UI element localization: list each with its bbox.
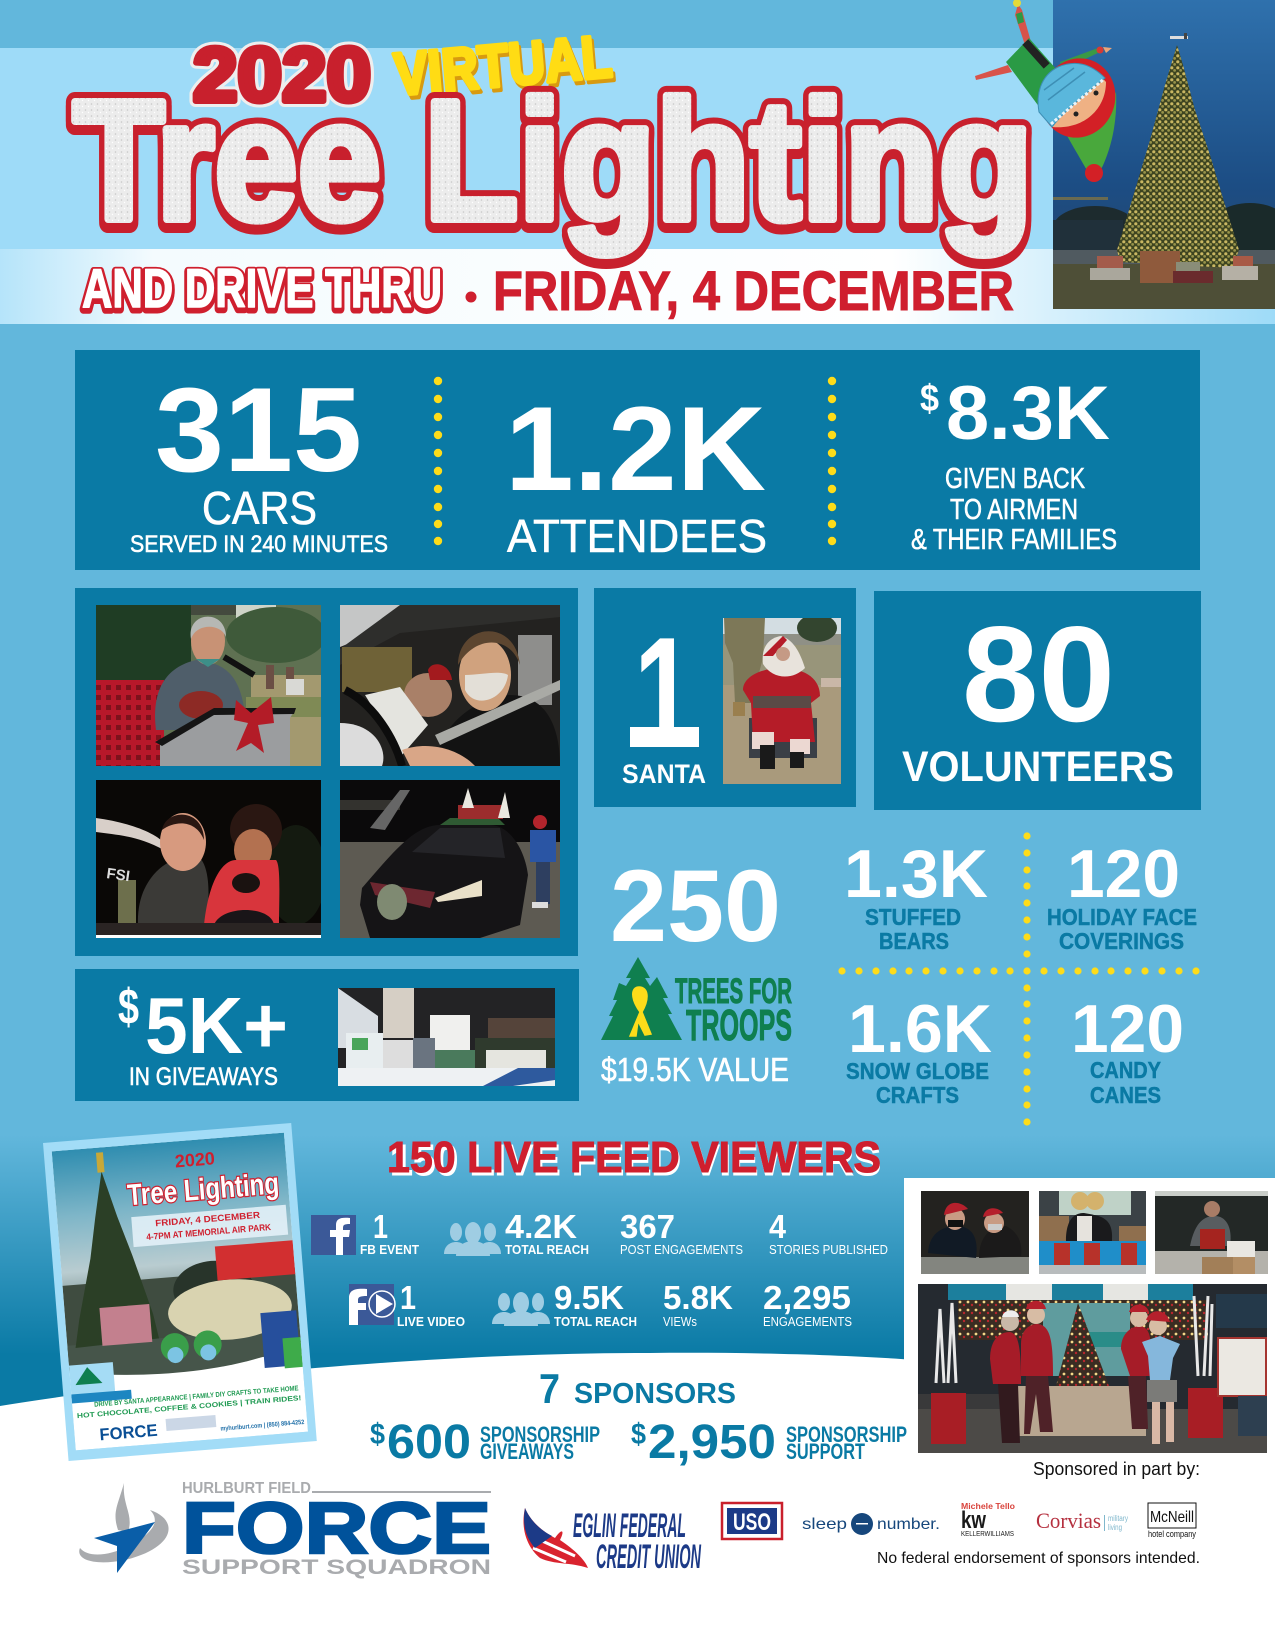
- subtitle: AND DRIVE THRU: AND DRIVE THRU: [82, 259, 442, 321]
- stat: 250 trees for troops: [601, 849, 792, 1088]
- yellow dotted dividers: [434, 377, 836, 545]
- flyer title: [124, 1143, 283, 1243]
- subtitle: date: FRIDAY, 4 DECEMBER: [493, 259, 1014, 322]
- row: Facebook live stats: TOTAL REACH: [554, 1314, 637, 1329]
- photo: Santa in chair: [723, 618, 841, 784]
- panel: 1 Santa: [594, 588, 856, 807]
- stat: holiday face coverings: HOLIDAY FACE: [1047, 904, 1197, 930]
- stat: 8.3K given back: [911, 371, 1117, 556]
- logo: Force Support Squadron: FORCE: [182, 1489, 491, 1569]
- stat: sponsorship support: 2,950: [648, 1416, 776, 1469]
- flyer title: FRIDAY, 4 DECEMBER: [155, 1210, 261, 1228]
- stat: stuffed bears: BEARS: [879, 928, 949, 954]
- row: Facebook live stats: ENGAGEMENTS: [763, 1314, 852, 1329]
- title: VIRTUAL: VIRTUAL: [394, 26, 617, 112]
- title: Tree Lighting: Lighting: [424, 70, 1033, 260]
- flyer title: 4-7PM AT MEMORIAL AIR PARK: [146, 1222, 272, 1242]
- photo: decorated car at night: [340, 780, 560, 938]
- stat: sponsorship support: $: [631, 1418, 646, 1451]
- stat: sponsorship giveaways: [370, 1416, 600, 1469]
- logo: USO: [722, 1503, 782, 1539]
- photo: giveaway prizes: [338, 988, 555, 1086]
- stat: 315 cars: SERVED IN 240 MINUTES: [130, 531, 388, 558]
- logo: Keller Williams: kw: [961, 1507, 986, 1534]
- logo: Eglin Federal Credit Union: [523, 1507, 702, 1576]
- flyer: tree lighting poster: [43, 1123, 317, 1461]
- title: Tree Lighting: Tree: [73, 66, 381, 256]
- row: Facebook live stats: 2,295: [763, 1279, 851, 1316]
- stat: 8.3K given back: 8.3K: [946, 371, 1110, 456]
- photo: woman in car with gift: [340, 605, 560, 766]
- stat: sponsorship giveaways: $: [370, 1418, 385, 1451]
- stat: 1.2K attendees: ATTENDEES: [507, 510, 767, 562]
- photo: volunteers with bags: [1039, 1191, 1146, 1274]
- row: Facebook event stats: 4: [769, 1208, 787, 1245]
- row: Facebook live stats: [349, 1279, 852, 1329]
- stat: sponsorship support: SUPPORT: [786, 1439, 865, 1464]
- flyer title: 2020: [174, 1148, 216, 1171]
- logo: Force Support Squadron: [79, 1480, 491, 1579]
- heading: live feed viewers: 150 LIVE FEED VIEWERS: [390, 1136, 881, 1185]
- title: Tree Lighting: [73, 66, 1033, 260]
- grid dots: [838, 832, 1200, 1126]
- stat: holiday face coverings: 120: [1067, 836, 1180, 912]
- panel: 80 volunteers: [874, 591, 1201, 810]
- disclaimer: No federal endorsement of sponsors intended.: [877, 1550, 1200, 1567]
- stat: stuffed bears: [844, 836, 988, 954]
- panel: 80 volunteers: VOLUNTEERS: [902, 743, 1174, 791]
- logo: Corvias: Corvias: [1036, 1508, 1101, 1533]
- logo: McNeill: hotel company: [1148, 1529, 1196, 1539]
- stat: candy canes: 120: [1071, 991, 1184, 1067]
- stat: 8.3K given back: $: [920, 378, 939, 420]
- panel: giveaways: IN GIVEAWAYS: [129, 1063, 278, 1091]
- stat: sponsorship giveaways: 600: [387, 1416, 471, 1469]
- title: 2020: 2020: [193, 33, 371, 118]
- stat: 8.3K given back: TO AIRMEN: [950, 494, 1078, 526]
- white wave section: [0, 1178, 1275, 1650]
- panel: giveaways: [75, 969, 579, 1101]
- row: Facebook event stats: TOTAL REACH: [505, 1242, 589, 1257]
- stat: sponsorship giveaways: SPONSORSHIP: [480, 1422, 600, 1447]
- panel: giveaways: $: [118, 979, 139, 1035]
- photo: woman and girl at night: FSI: [105, 865, 131, 885]
- icon: Facebook live: [349, 1284, 395, 1325]
- stat: 8.3K given back: & THEIR FAMILIES: [911, 524, 1117, 556]
- stat: holiday face coverings: [1047, 836, 1197, 954]
- logo: Keller Williams: [961, 1502, 1015, 1538]
- row: Facebook event stats: [311, 1208, 888, 1257]
- stat: sponsorship support: [631, 1416, 907, 1469]
- stat: snow globe crafts: [846, 991, 992, 1108]
- stat: snow globe crafts: CRAFTS: [876, 1082, 959, 1108]
- icon: Facebook: [311, 1215, 356, 1255]
- row: Facebook live stats: 9.5K: [554, 1279, 624, 1316]
- logo: Keller Williams: Michele Tello: [961, 1502, 1015, 1511]
- title: Tree Lighting: Tree: [73, 66, 381, 256]
- logo: USO: USO: [733, 1509, 771, 1536]
- stat: 315 cars: CARS: [202, 482, 317, 534]
- sponsors heading: 7: [539, 1365, 560, 1412]
- sponsors heading: [539, 1365, 736, 1412]
- logo: McNeill: [1148, 1503, 1196, 1539]
- icon: upside-down elf: [975, 0, 1126, 182]
- logo: Keller Williams: KELLERWILLIAMS: [961, 1531, 1014, 1538]
- logo: Force Support Squadron: HURLBURT FIELD: [182, 1480, 311, 1497]
- icon: audience: [444, 1222, 501, 1256]
- stat: holiday face coverings: COVERINGS: [1059, 928, 1184, 954]
- stat: stuffed bears: STUFFED: [865, 904, 961, 930]
- logo: Corvias: living: [1108, 1523, 1122, 1532]
- row: Facebook live stats: LIVE VIDEO: [397, 1314, 465, 1329]
- logo: Sleep Number: number.: [877, 1516, 940, 1533]
- icon: Trees for Troops logo: TROOPS: [686, 1001, 792, 1050]
- row: Facebook event stats: POST ENGAGEMENTS: [620, 1242, 743, 1257]
- logo: Force Support Squadron: SUPPORT SQUADRON: [182, 1556, 491, 1579]
- title: Tree Lighting: Lighting: [424, 66, 1033, 256]
- sponsors heading: SPONSORS: [574, 1378, 736, 1410]
- row: Facebook live stats: 1: [400, 1279, 416, 1316]
- infographic canvas: EGLIN FEDERAL: [573, 1507, 686, 1545]
- row: Facebook event stats: STORIES PUBLISHED: [769, 1242, 888, 1257]
- flyer details: [76, 1385, 305, 1446]
- row: Facebook event stats: 4.2K: [505, 1208, 577, 1245]
- row: Facebook event stats: 1: [373, 1208, 388, 1245]
- photo: speaker at podium: [96, 605, 321, 766]
- title: Tree Lighting: Lighting: [424, 66, 1033, 256]
- icon: audience: [492, 1292, 550, 1326]
- panel: 80 volunteers: 80: [962, 598, 1115, 750]
- stat: sponsorship support: SPONSORSHIP: [786, 1422, 907, 1447]
- title: VIRTUAL: VIRTUAL: [392, 22, 615, 108]
- icon: flame and swoosh: [79, 1483, 169, 1573]
- row: Facebook event stats: FB EVENT: [360, 1242, 419, 1257]
- stat: candy canes: [1071, 991, 1184, 1108]
- row: Facebook event stats: 367: [620, 1208, 675, 1245]
- title: Tree Lighting: Tree: [73, 70, 381, 260]
- stat: snow globe crafts: SNOW GLOBE: [846, 1058, 989, 1084]
- stat: 1.2K attendees: 1.2K: [505, 382, 766, 516]
- icon: Trees for Troops logo: TREES FOR: [675, 972, 792, 1011]
- row: Facebook live stats: VIEWs: [663, 1314, 697, 1329]
- logo: Corvias: military: [1108, 1514, 1128, 1523]
- logo: Sleep Number: sleep: [802, 1516, 847, 1533]
- flyer details: FORCE: [99, 1421, 158, 1444]
- stat: sponsorship giveaways: GIVEAWAYS: [480, 1439, 574, 1464]
- heading: live feed viewers: 150 LIVE FEED VIEWERS: [387, 1133, 881, 1182]
- stat: 8.3K given back: GIVEN BACK: [945, 463, 1086, 495]
- panel: 1 Santa: 1: [634, 605, 694, 778]
- stat: snow globe crafts: 1.6K: [848, 991, 992, 1067]
- photo: team at booth: [921, 1191, 1029, 1274]
- title: 2020: 2020: [193, 33, 371, 118]
- stat: candy canes: CANDY: [1090, 1057, 1161, 1083]
- photo: volunteer with boxes: [1155, 1191, 1268, 1274]
- stat: 250 trees for troops: 250: [610, 849, 781, 963]
- photo: lit Christmas tree: [1053, 0, 1275, 309]
- photo: group at decorated booth: [918, 1284, 1267, 1453]
- infographic canvas: CREDIT UNION: [596, 1538, 702, 1576]
- sponsored-in-part label: Sponsored in part by:: [1033, 1459, 1200, 1479]
- stat: candy canes: CANES: [1090, 1082, 1161, 1108]
- row: Facebook live stats: 5.8K: [663, 1279, 733, 1316]
- panel: headline stats: [75, 350, 1200, 570]
- stat: 250 trees for troops: $19.5K VALUE: [601, 1051, 789, 1088]
- logo: McNeill: McNeill: [1150, 1509, 1194, 1526]
- header banner: [0, 48, 1275, 324]
- stat: 315 cars: [130, 363, 388, 558]
- stat: 315 cars: 315: [155, 363, 362, 497]
- subtitle: AND DRIVE THRU: AND DRIVE THRU: [82, 257, 442, 319]
- photo: woman and girl at night: [96, 780, 321, 938]
- panel: event photos: [75, 588, 578, 956]
- panel: giveaways: 5K+: [145, 981, 288, 1070]
- stat: stuffed bears: 1.3K: [844, 836, 988, 912]
- logo: Sleep Number: [802, 1513, 940, 1535]
- panel: 1 Santa: SANTA: [622, 759, 706, 789]
- icon: Trees for Troops logo: [601, 957, 792, 1050]
- flyer details: HOT CHOCOLATE, COFFEE & COOKIES | TRAIN RIDES!: [77, 1395, 302, 1420]
